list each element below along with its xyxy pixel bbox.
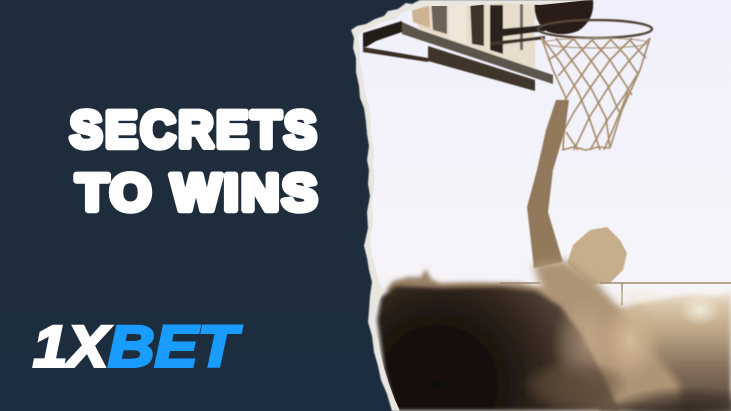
- left arm of frame: [363, 21, 402, 47]
- silhouette body: [377, 286, 620, 411]
- soft shadow and light blends: [554, 314, 604, 378]
- player arm: [527, 100, 569, 268]
- backboard panel: [413, 0, 535, 70]
- logo 1X white: 1X: [33, 314, 111, 380]
- title: SECRETS TO WINS: [70, 102, 317, 221]
- backboard: [363, 0, 553, 91]
- lower backboard frame: [402, 22, 553, 84]
- hoop rim: [538, 20, 652, 48]
- tan fringe above silhouette: [384, 268, 548, 298]
- backboard uprights: [430, 6, 448, 34]
- title line 1: SECRETS: [70, 102, 316, 158]
- logo BET blue: BET: [108, 314, 242, 380]
- basketball: [535, 0, 593, 34]
- dark foreground silhouette: [377, 269, 731, 411]
- rim bracket: [502, 24, 546, 37]
- background field: [600, 286, 731, 411]
- net: [541, 36, 650, 150]
- logo: 1XBET: [33, 314, 242, 380]
- player torso glow: [520, 260, 680, 405]
- player head: [567, 227, 627, 285]
- torn paper edge: [351, 0, 731, 411]
- photo: basketball player reaching for hoop: [340, 0, 731, 411]
- title line 2: TO WINS: [76, 164, 317, 221]
- sky: [340, 0, 731, 411]
- distant fence: [500, 283, 731, 305]
